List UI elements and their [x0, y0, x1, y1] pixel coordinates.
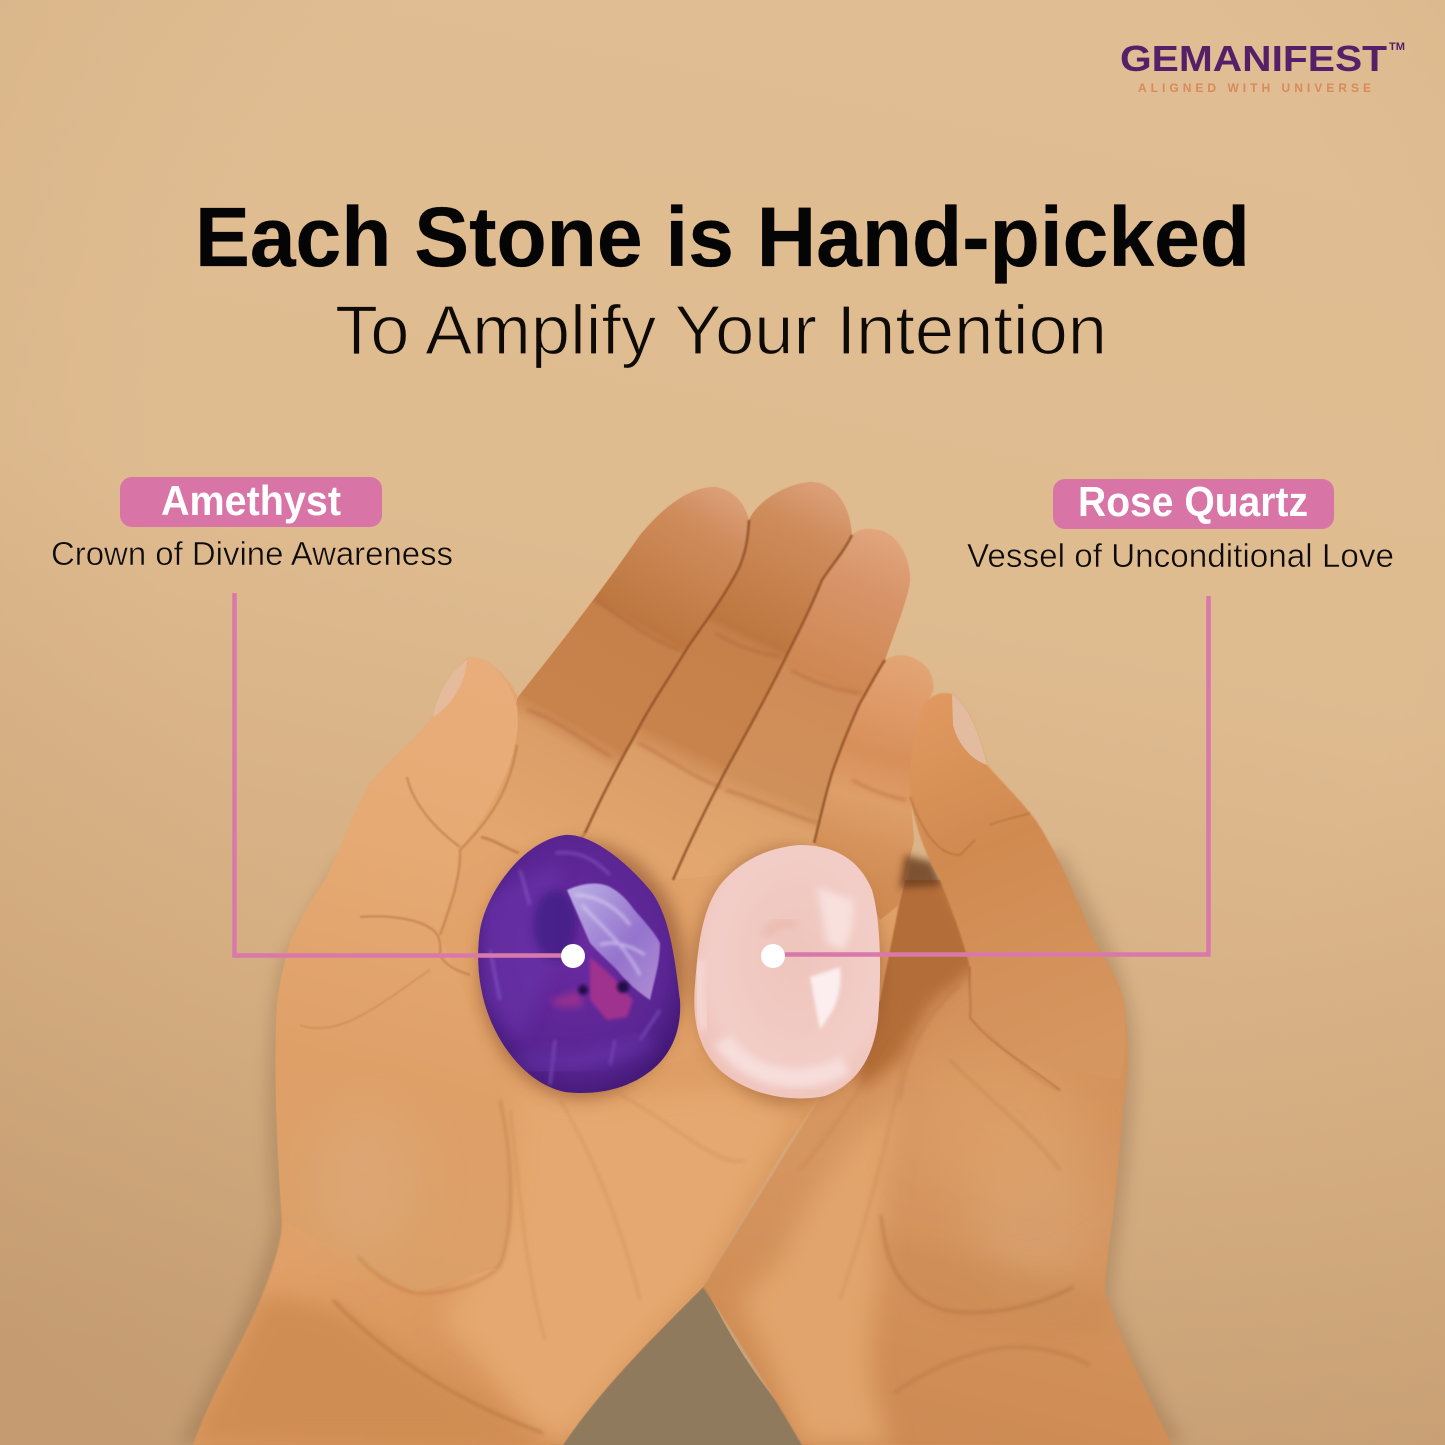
shadow under hands	[550, 1285, 815, 1445]
finger creases	[527, 600, 906, 823]
label: rose quartz	[967, 478, 1394, 574]
right thumb	[900, 693, 1126, 1090]
callout: amethyst connector	[234, 593, 585, 968]
callout: rose quartz connector	[761, 596, 1208, 968]
logo: GEMANIFEST	[1120, 38, 1387, 79]
left thumb and thenar	[276, 658, 518, 1293]
label: rose quartz: Vessel of Unconditional Love	[967, 537, 1394, 574]
left thumb folds	[360, 745, 517, 975]
logo	[1120, 38, 1405, 95]
nail: right thumb	[952, 694, 987, 765]
fingers	[516, 487, 749, 772]
right hand palm	[703, 850, 1185, 1445]
logo: TM	[1389, 41, 1405, 53]
label: amethyst: Amethyst	[161, 477, 341, 524]
illustration: cupped hands	[178, 482, 1185, 1445]
subtitle: To Amplify Your Intention	[335, 291, 1107, 369]
lower palm shading	[440, 1085, 800, 1445]
title: Each Stone is Hand-picked	[195, 190, 1250, 284]
gemstone: amethyst	[478, 835, 685, 1098]
finger gaps	[585, 520, 749, 833]
logo: ALIGNED WITH UNIVERSE	[1138, 81, 1371, 95]
gemstone: rose quartz	[692, 845, 884, 1103]
label: rose quartz: Rose Quartz	[1078, 478, 1308, 525]
nail: left thumb	[433, 660, 467, 717]
left hand	[178, 482, 933, 1445]
label: amethyst: Crown of Divine Awareness	[51, 535, 453, 572]
label: amethyst	[51, 477, 453, 572]
